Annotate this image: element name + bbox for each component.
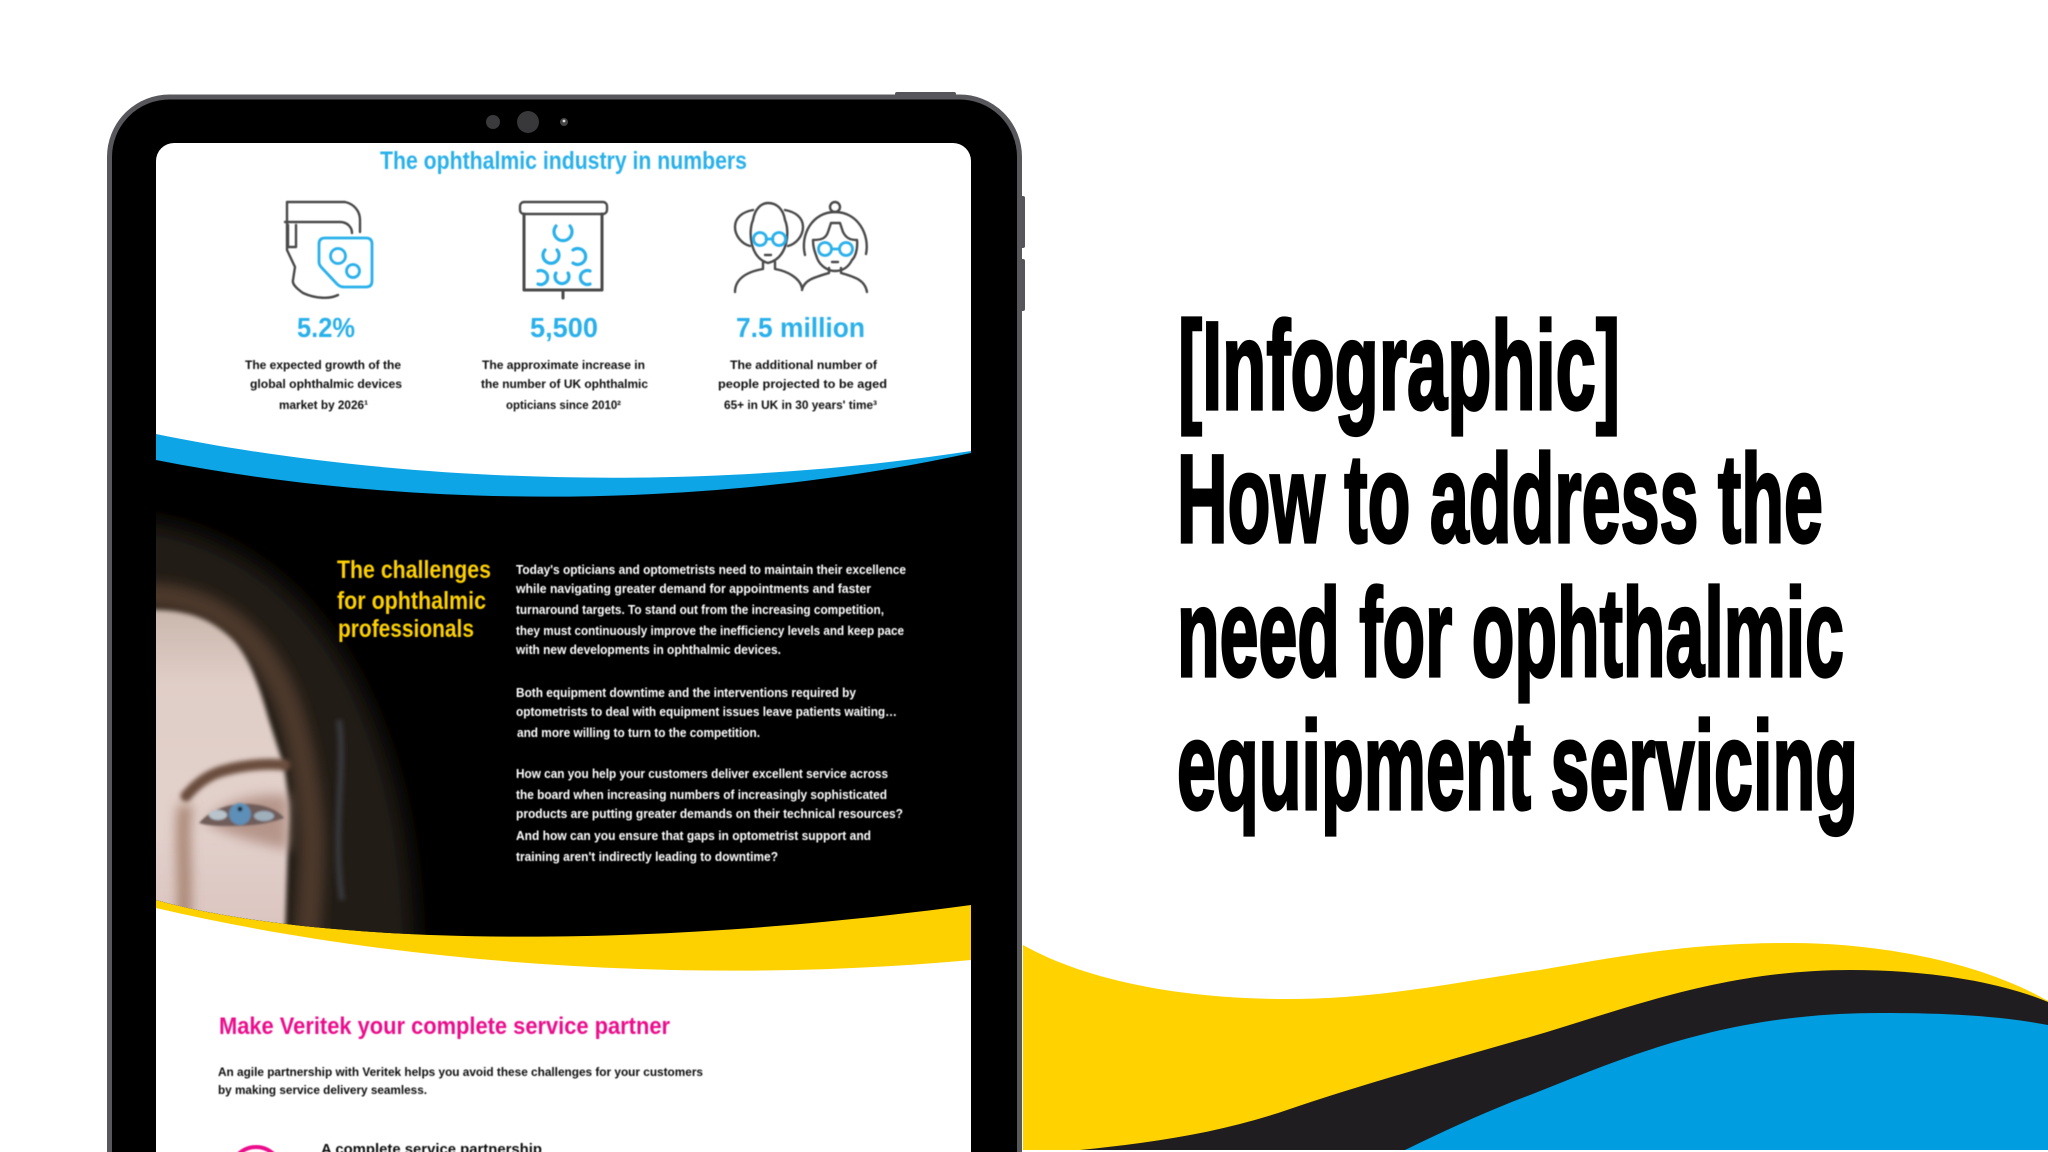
tablet hardware buttons — [895, 92, 1025, 311]
challenges body text: And how can you ensure that gaps in optometrist support and — [516, 828, 871, 843]
stat: 5.2%: The expected growth of the — [245, 358, 401, 372]
heading: the challenges — [337, 556, 491, 643]
stat: 5,500: The approximate increase in — [482, 358, 645, 372]
stat: 7.5 million: people projected to be aged — [718, 377, 887, 391]
stat: 5.2% — [245, 312, 402, 412]
stat: 5.2%: 5.2% — [297, 312, 355, 343]
stat: 5,500: 5,500 — [530, 312, 598, 343]
challenges body text: turnaround targets. To stand out from the increasing competition, — [516, 602, 884, 617]
challenges body text: training aren't indirectly leading to downtime? — [516, 849, 778, 864]
icon: face with contact lens — [285, 202, 372, 298]
heading: the challenges: The challenges — [337, 556, 491, 584]
yellow wave — [156, 900, 971, 971]
icon: eye test chart — [520, 202, 607, 298]
wave graphic: yellow, black and blue swoosh — [1023, 943, 2048, 1150]
challenges body text: Today's opticians and optometrists need to maintain their excellence — [516, 562, 906, 577]
heading: the challenges: professionals — [338, 615, 474, 643]
stat: 7.5 million: The additional number of — [730, 358, 878, 372]
challenges body text: products are putting greater demands on their technical resources? — [516, 806, 903, 821]
service partner intro text — [218, 1065, 703, 1097]
skin — [156, 606, 292, 924]
title: [Infographic] — [1178, 297, 1620, 436]
challenges body text: optometrists to deal with equipment issues leave patients waiting… — [516, 704, 897, 719]
tablet cameras — [486, 111, 568, 133]
tablet screen — [130, 143, 971, 1152]
blue wave — [156, 434, 971, 497]
stat: 5.2%: global ophthalmic devices — [250, 377, 402, 391]
stat: 7.5 million: 7.5 million — [736, 312, 865, 343]
heading: service partner: Make Veritek your complete service partner — [219, 1013, 670, 1040]
service partner intro text: by making service delivery seamless. — [218, 1083, 427, 1097]
stat: 5,500 — [481, 312, 648, 412]
stat: 5,500: the number of UK ophthalmic — [481, 377, 648, 391]
challenges body text — [515, 562, 906, 864]
black challenges panel — [156, 453, 971, 937]
challenges body text: they must continuously improve the inefficiency levels and keep pace — [516, 623, 904, 638]
challenges body text: How can you help your customers deliver excellent service across — [516, 766, 888, 781]
heading: the challenges: for ophthalmic — [337, 587, 486, 615]
stat: 7.5 million — [718, 312, 887, 412]
tablet device — [110, 92, 1025, 1152]
eyebrow — [186, 764, 285, 796]
screen background — [156, 143, 971, 1152]
brown hair band — [140, 596, 312, 980]
section heading: industry in numbers: The ophthalmic industry in numbers — [380, 147, 747, 175]
tablet body — [110, 97, 1020, 1152]
stat: 5,500: opticians since 2010² — [506, 398, 621, 412]
service partner intro text: An agile partnership with Veritek helps you avoid these challenges for your customers — [218, 1065, 703, 1079]
challenges body text: and more willing to turn to the competition. — [517, 725, 760, 740]
grey hair strand — [338, 720, 342, 900]
hair mass — [156, 516, 424, 935]
stat: 7.5 million: 65+ in UK in 30 years' time³ — [724, 398, 877, 412]
challenges body text: with new developments in ophthalmic devices. — [515, 642, 781, 657]
challenges body text: the board when increasing numbers of increasingly sophisticated — [516, 787, 887, 802]
nose shadow — [183, 805, 186, 920]
photo: woman's face with blue eye — [156, 516, 424, 935]
icon: elderly couple with glasses — [735, 202, 867, 292]
eye socket shadow — [205, 795, 288, 850]
title — [1177, 297, 1858, 836]
challenges body text: while navigating greater demand for appointments and faster — [515, 581, 871, 596]
eye — [199, 803, 284, 826]
challenges body text: Both equipment downtime and the interventions required by — [516, 685, 857, 700]
stat: 5.2%: market by 2026¹ — [279, 398, 368, 412]
icon: pink partnership circle — [231, 1147, 281, 1152]
